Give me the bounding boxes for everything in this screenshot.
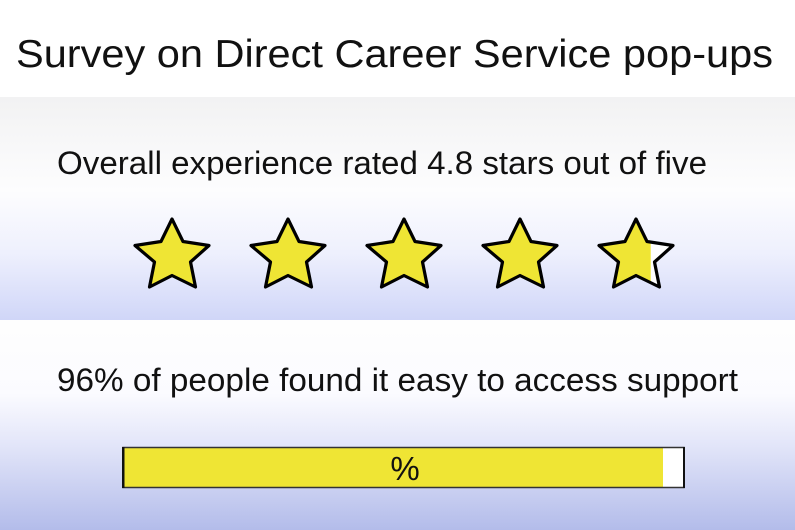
rating heading: Overall experience rated 4.8 stars out of five — [57, 145, 707, 181]
percent sign: % — [390, 450, 420, 487]
progress bar — [122, 447, 685, 488]
panel: star rating — [0, 97, 795, 320]
support heading: 96% of people found it easy to access support — [57, 362, 738, 398]
star 3 — [367, 219, 441, 287]
star 5 partly filled — [599, 219, 673, 287]
star 2 — [251, 219, 325, 287]
title: Survey on Direct Career Service pop-ups — [16, 33, 773, 76]
panel: access support — [0, 320, 795, 530]
star 4 — [483, 219, 557, 287]
star 1 — [135, 219, 209, 287]
